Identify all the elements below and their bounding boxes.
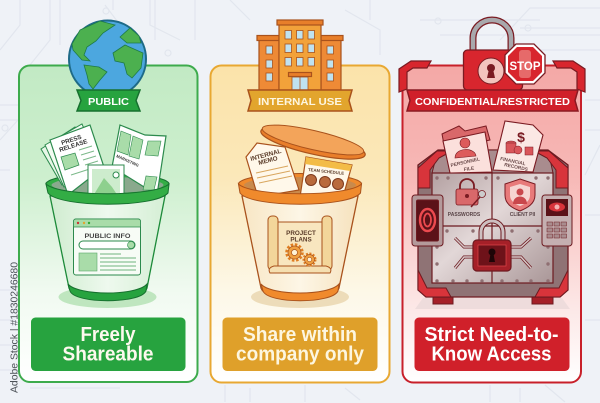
icon: padlock with stop sign: STOP	[510, 61, 541, 73]
ribbon: public	[77, 90, 140, 111]
document: personnel file	[442, 126, 492, 173]
icon: passwords padlock and key: PASSWORDS	[448, 212, 481, 218]
panel: public	[19, 20, 198, 382]
document: project plans blueprint	[268, 216, 332, 273]
panel corner bracket: left	[399, 61, 431, 92]
icon: client pii shield	[505, 179, 536, 218]
button: freely shareable	[31, 318, 186, 371]
image: photo card	[88, 165, 124, 199]
document: project plans blueprint: PROJECT	[286, 230, 316, 237]
button: freely shareable: Freely	[80, 324, 136, 346]
recycling bucket: public	[46, 184, 169, 308]
icon: client pii shield: CLIENT PII	[510, 212, 536, 218]
device: eye scanner and keypad	[542, 195, 572, 246]
document: financial records: RECORDS	[504, 162, 529, 173]
icon: office building	[257, 20, 343, 90]
ribbon: confidential restricted: CONFIDENTIAL/RESTRICTED	[415, 96, 570, 108]
button: share within company only: Share within	[243, 324, 357, 346]
icon: passwords padlock and key	[448, 179, 486, 218]
device: fingerprint scanner	[412, 195, 443, 246]
document: marketing brochure	[112, 125, 166, 195]
ribbon: internal use: INTERNAL USE	[258, 96, 342, 108]
panel: internal use	[210, 20, 390, 382]
recycling bucket: internal	[238, 184, 362, 308]
document: personnel file: PERSONNEL	[450, 156, 481, 169]
document: internal memo: MEMO	[258, 155, 279, 167]
panel card: public	[19, 66, 198, 382]
document: internal memo	[246, 143, 299, 197]
vault: safe body	[418, 150, 568, 304]
panel: confidential	[399, 20, 585, 382]
panel corner bracket: right	[553, 61, 585, 92]
recycling bucket back rim: internal	[238, 174, 362, 194]
document: project plans blueprint: PLANS	[290, 236, 312, 244]
document: press release: PRESS	[60, 134, 83, 147]
icon: padlock with stop sign	[464, 20, 545, 90]
document: team schedule	[300, 157, 352, 197]
ribbon: confidential restricted	[407, 90, 578, 111]
document: internal memo: INTERNAL	[250, 148, 282, 163]
button: strict need-to-know access: Know Access	[432, 344, 552, 366]
document: financial records: $	[517, 129, 525, 145]
button: strict need-to-know access	[414, 318, 570, 371]
label: public info window	[74, 219, 140, 275]
button: share within company only	[222, 318, 378, 371]
panel card: internal	[210, 66, 390, 382]
label: public info window: PUBLIC INFO	[84, 233, 130, 240]
ribbon: internal use	[248, 90, 352, 111]
button: strict need-to-know access: Strict Need-to-	[424, 324, 558, 346]
bucket back rim: public	[46, 174, 169, 194]
button: freely shareable: Shareable	[62, 344, 154, 366]
bucket lid: internal	[258, 119, 368, 166]
document: financial records	[493, 121, 543, 173]
document: marketing brochure: MARKETING	[116, 153, 140, 168]
icon: globe	[69, 20, 146, 98]
document: press release	[41, 124, 104, 195]
icon: central lock with circuit bolts	[455, 221, 531, 271]
document: personnel file: FILE	[463, 165, 475, 173]
document: press release: RELEASE	[58, 138, 88, 154]
vault shadow	[415, 298, 570, 309]
document: team schedule: TEAM SCHEDULE	[308, 167, 344, 176]
ribbon: public: PUBLIC	[88, 96, 129, 108]
document: financial records: FINANCIAL	[500, 156, 526, 167]
panel card: confidential	[402, 66, 581, 382]
watermark: stock credit: Adobe Stock | #1830246680	[8, 262, 20, 393]
button: share within company only: company only	[236, 344, 365, 366]
